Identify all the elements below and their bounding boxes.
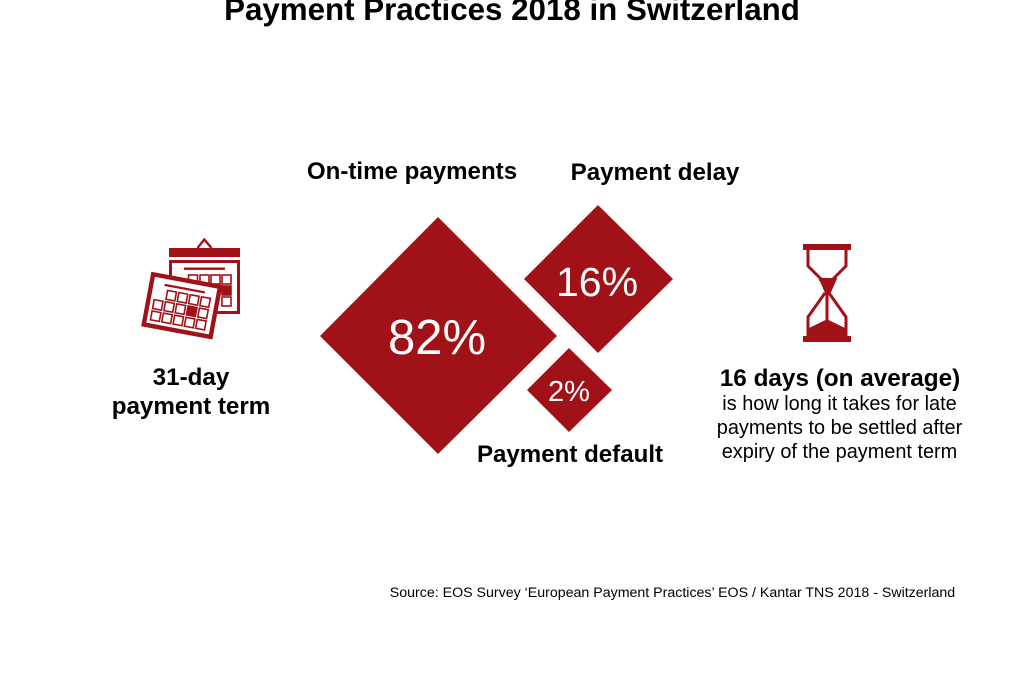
diamond: 82%: 82%	[388, 311, 486, 365]
label: on-time payments: On-time payments	[307, 158, 517, 185]
label: payment default: Payment default	[477, 441, 663, 468]
text: 16 days on average: 16 days (on average)	[720, 365, 960, 392]
diamond: 2%: 2%	[548, 376, 590, 408]
source note: Source: EOS Survey ‘European Payment Practices’ EOS / Kantar TNS 2018 - Switzerland	[390, 585, 955, 601]
diamond: 16%: 16%	[556, 259, 638, 305]
diamond: 2%	[527, 348, 612, 432]
text: 16 days on average: expiry of the payment term	[722, 441, 957, 463]
text: payment term: payment term	[112, 393, 270, 420]
icon: calendars	[144, 240, 240, 337]
text: 16 days on average: is how long it takes for late	[722, 393, 957, 415]
text: payment term	[112, 364, 270, 420]
text: 16 days on average	[717, 365, 963, 463]
icon: hourglass	[803, 244, 851, 342]
back calendar	[169, 240, 240, 312]
front calendar	[144, 274, 220, 337]
diamond: 82%	[320, 217, 557, 454]
text: 16 days on average: payments to be settled after	[717, 417, 963, 439]
label: payment delay: Payment delay	[571, 159, 740, 186]
text: payment term: 31-day	[153, 364, 230, 391]
diamond: 16%	[524, 205, 673, 353]
